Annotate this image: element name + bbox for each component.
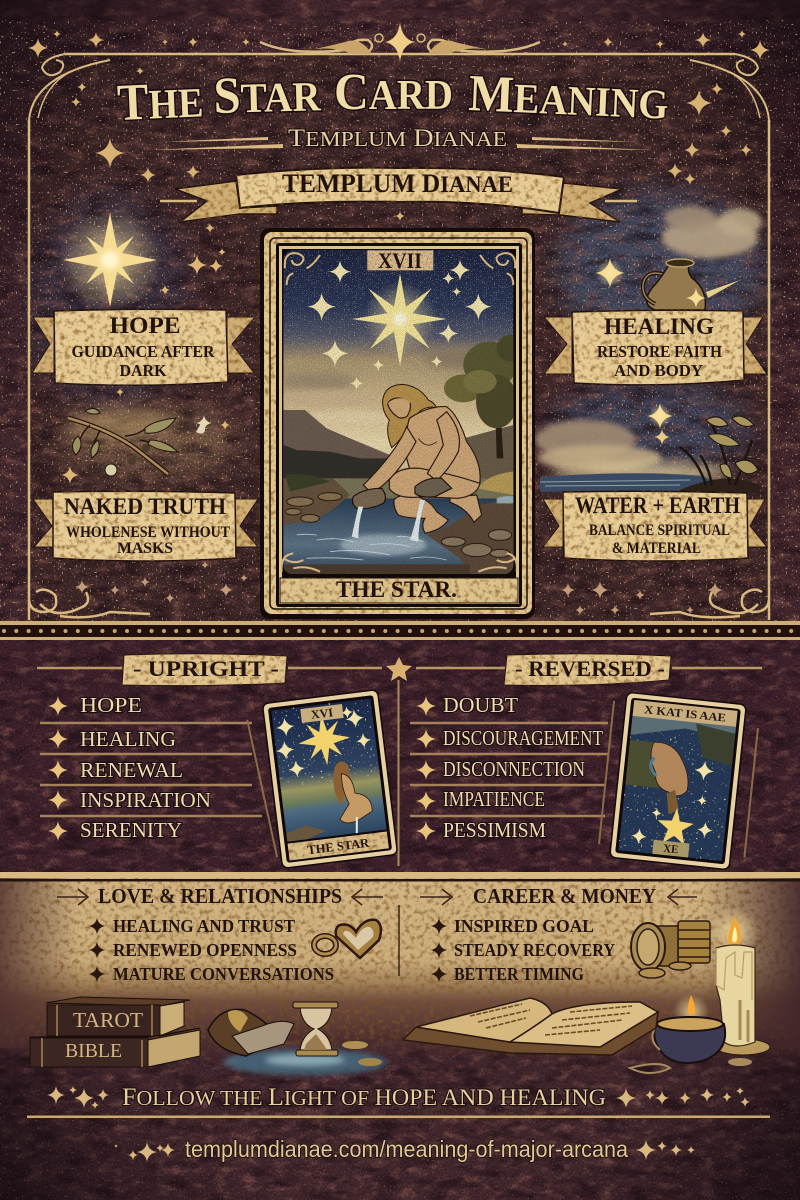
jugs — [353, 478, 452, 509]
main tarot card: The Star: XVII — [378, 248, 422, 273]
icon: spilled water, shell and hourglass — [208, 1002, 387, 1075]
panel: career and money: BETTER TIMING — [454, 964, 584, 984]
top ribbon banner — [160, 168, 637, 222]
tagline — [27, 1084, 770, 1118]
upright list: RENEWAL — [80, 758, 183, 782]
subtitle with flourishes — [150, 125, 652, 152]
panel: hope banner: HOPE — [110, 313, 180, 338]
panel: career and money: CAREER & MONEY — [473, 884, 656, 908]
upright heading plaque — [122, 654, 287, 686]
subtitle with flourishes: TEMPLUM DIANAE — [288, 125, 507, 152]
icon: shore plant and small stars, right — [647, 403, 760, 493]
section dividers and star — [37, 657, 762, 866]
bottom corner scrolls — [29, 590, 769, 617]
panel: water + earth banner: & MATERIAL — [612, 540, 701, 557]
title: STAR — [213, 65, 322, 125]
card caption — [280, 577, 518, 603]
icon: large radiant star, left — [58, 208, 162, 312]
panel: water + earth banner — [543, 491, 767, 561]
reversed list: DOUBT — [443, 693, 518, 717]
small reversed card: X KAT IS AAE — [644, 704, 727, 725]
icon: tarot and bible books: BIBLE — [65, 1040, 122, 1062]
water streams — [352, 500, 425, 542]
small upright card — [245, 690, 398, 871]
icon: olive branch — [65, 408, 205, 476]
icon: tarot and bible books: TAROT — [73, 1008, 143, 1032]
woman hair back — [383, 384, 437, 448]
lower panel top rule — [0, 872, 800, 882]
title — [116, 64, 670, 132]
panel: hope banner: GUIDANCE AFTER — [72, 342, 216, 361]
small reversed card — [598, 691, 760, 871]
panel: naked truth banner — [33, 491, 258, 561]
panel: love and relationships: RENEWED OPENNESS — [113, 940, 297, 960]
upright list: HEALING — [80, 727, 176, 751]
panel: water + earth banner: WATER + EARTH — [575, 493, 740, 518]
title: MEANING — [467, 65, 670, 131]
panel: love and relationships: MATURE CONVERSATIONS — [113, 964, 334, 984]
numeral plaque — [367, 250, 433, 270]
small stars around left star — [61, 248, 230, 484]
frame border — [29, 54, 769, 620]
small reversed card: XE — [663, 843, 679, 856]
bottom star sprinkle in frame — [75, 561, 723, 615]
reversed heading plaque: - REVERSED - — [515, 656, 665, 681]
top ornament with star — [260, 22, 540, 62]
small upright card: XVI — [310, 705, 334, 722]
panel: hope banner — [32, 309, 255, 385]
panel: career and money: STEADY RECOVERY — [454, 940, 615, 960]
corner ornaments — [281, 253, 517, 572]
reversed list — [410, 693, 608, 842]
reversed list: PESSIMISM — [443, 818, 546, 842]
website url: templumdianae.com/meaning-of-major-arcana — [185, 1136, 628, 1162]
card caption: THE STAR. — [336, 577, 457, 602]
icon: small bowl candle — [630, 994, 752, 1073]
panel: healing banner: AND BODY — [614, 361, 703, 380]
upright list: INSPIRATION — [80, 788, 211, 812]
panel: career and money: INSPIRED GOAL — [454, 916, 594, 936]
panel: healing banner: HEALING — [604, 314, 714, 339]
reversed list: IMPATIENCE — [443, 787, 545, 811]
column divider — [398, 905, 400, 976]
panel: naked truth banner: MASKS — [117, 540, 173, 557]
icon: tarot and bible books — [30, 997, 200, 1067]
panel: naked truth banner: WHOLENESE WITHOUT — [66, 524, 230, 541]
upright list — [40, 693, 262, 842]
icon: tall candle with flame — [708, 906, 770, 1055]
panel: love and relationships — [57, 884, 383, 984]
panel: career and money — [420, 884, 697, 984]
title: CARD — [334, 64, 453, 121]
divider band — [0, 621, 800, 640]
tagline: FOLLOW THE LIGHT OF HOPE AND HEALING — [122, 1084, 606, 1111]
panel: hope banner: DARK — [120, 361, 167, 380]
top ribbon banner: TEMPLUM DIANAE — [282, 169, 513, 198]
card star — [366, 284, 434, 351]
reversed list: DISCONNECTION — [443, 757, 585, 781]
title: THE — [116, 71, 204, 132]
icon: heart and ring — [314, 920, 381, 958]
panel: love and relationships: LOVE & RELATIONSHIPS — [98, 884, 342, 908]
upright heading plaque: - UPRIGHT - — [133, 656, 279, 681]
panel: healing banner: RESTORE FAITH — [597, 342, 722, 361]
upright list: SERENITY — [80, 818, 182, 842]
panel: healing banner — [544, 310, 767, 385]
panel: naked truth banner: NAKED TRUTH — [64, 494, 226, 519]
icon: open book — [403, 998, 658, 1055]
woman body — [363, 398, 482, 533]
reversed list: DISCOURAGEMENT — [443, 726, 603, 750]
small upright card: THE STAR — [307, 836, 371, 857]
panel: love and relationships: HEALING AND TRUST — [113, 916, 295, 936]
icon: coin stacks — [631, 921, 710, 978]
main tarot card: The Star — [260, 228, 535, 619]
upright list: HOPE — [80, 693, 142, 717]
stars along the top — [28, 30, 770, 233]
reversed heading plaque — [504, 654, 671, 685]
panel: water + earth banner: BALANCE SPIRITUAL — [589, 522, 730, 539]
card illustration — [277, 250, 523, 575]
icon: water jug, right — [595, 258, 740, 310]
lower parchment panel — [0, 878, 800, 1060]
clouds on right panel — [535, 206, 762, 492]
